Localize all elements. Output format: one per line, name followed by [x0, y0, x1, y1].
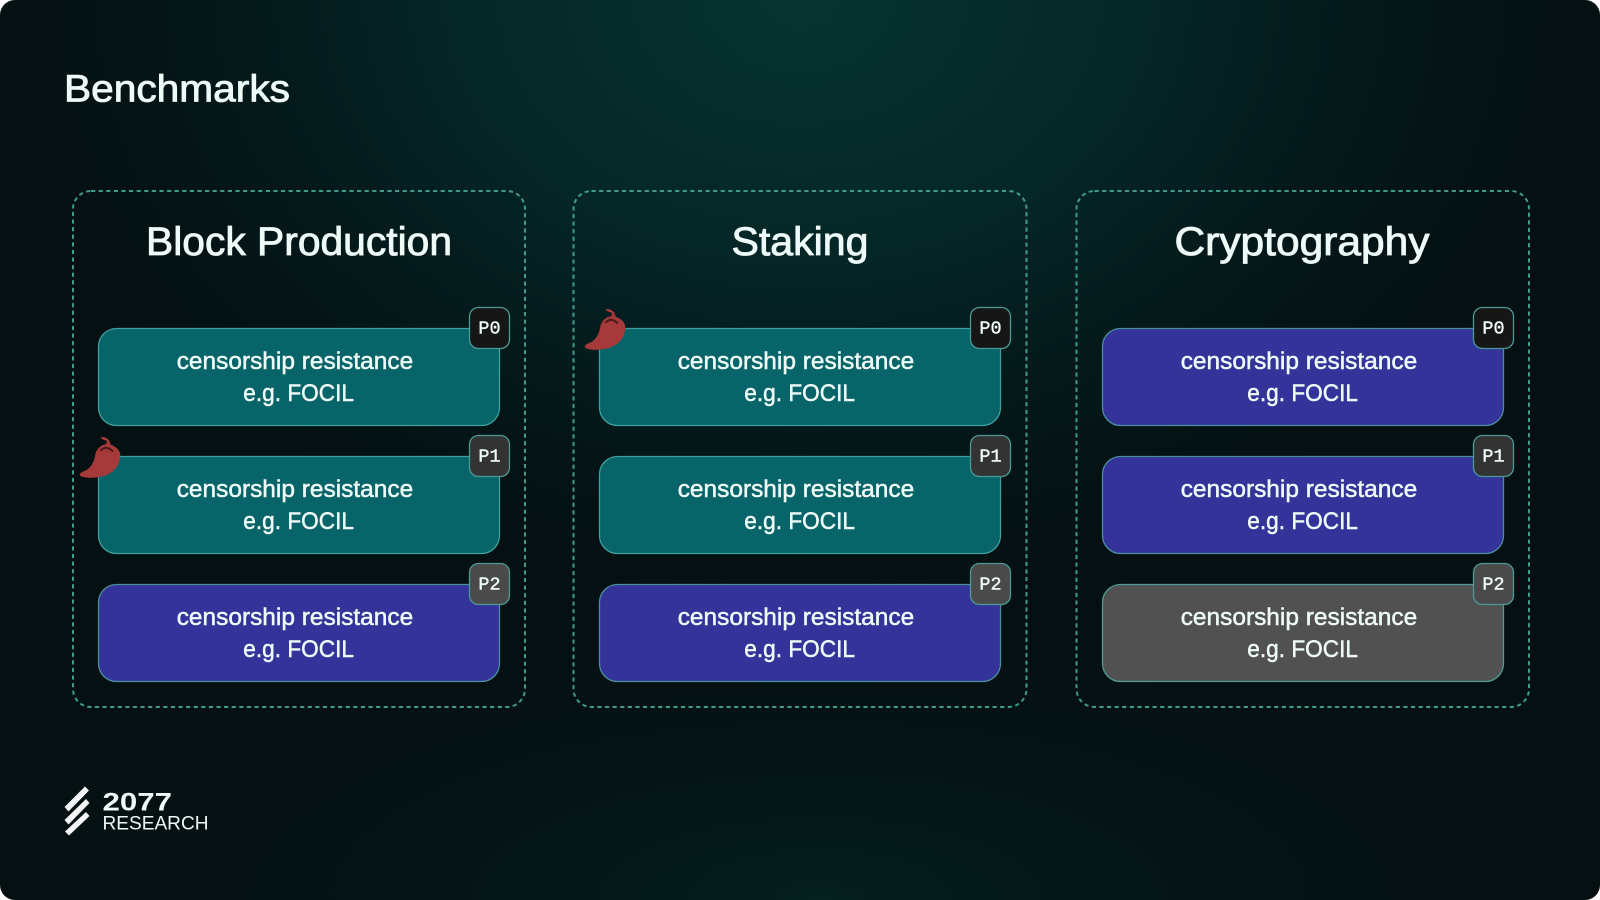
card: P0: P0: [979, 318, 1002, 340]
card: P2: censorship resistance: [678, 604, 914, 631]
card: P1: e.g. FOCIL: [243, 508, 354, 535]
card: P0: e.g. FOCIL: [243, 380, 354, 407]
card: P0: censorship resistance: [678, 348, 914, 375]
card: P0: [1102, 308, 1514, 426]
panel: Cryptography: [1076, 191, 1529, 707]
panel heading: Block Production: [146, 220, 452, 264]
logo: 2077 Research: 2077: [102, 789, 172, 817]
card: P2: e.g. FOCIL: [243, 636, 354, 663]
icon: chili pepper: [80, 437, 120, 478]
card: P1: [600, 436, 1010, 554]
card: P0: censorship resistance: [177, 348, 413, 375]
panel heading: Staking: [732, 220, 868, 264]
panel: Staking: [574, 191, 1026, 707]
card: P1: [98, 436, 510, 554]
card: P1: censorship resistance: [678, 476, 914, 503]
card: P2: [600, 564, 1010, 682]
logo: 2077 Research: RESEARCH: [102, 814, 208, 834]
card: P2: e.g. FOCIL: [744, 636, 855, 663]
card: P0: e.g. FOCIL: [1247, 380, 1358, 407]
card: P1: P1: [1482, 446, 1505, 468]
icon: logo bars: [64, 786, 90, 836]
card: P1: P1: [478, 446, 501, 468]
card: P0: e.g. FOCIL: [744, 380, 855, 407]
panel heading: Cryptography: [1174, 220, 1430, 264]
card: P0: P0: [478, 318, 501, 340]
card: P1: [1102, 436, 1514, 554]
card: P0: [98, 308, 510, 426]
card: P1: P1: [979, 446, 1002, 468]
card: P2: P2: [478, 574, 501, 596]
card: P2: P2: [1482, 574, 1505, 596]
title: Benchmarks: [64, 68, 290, 110]
card: P2: censorship resistance: [1181, 604, 1417, 631]
card: P2: e.g. FOCIL: [1247, 636, 1358, 663]
card: P2: censorship resistance: [177, 604, 413, 631]
panel: Block Production: [73, 191, 525, 707]
card: P1: e.g. FOCIL: [744, 508, 855, 535]
card: P2: [98, 564, 510, 682]
card: P0: [600, 308, 1010, 426]
card: P2: P2: [979, 574, 1002, 596]
card: P1: censorship resistance: [177, 476, 413, 503]
logo: 2077 Research: [64, 786, 208, 836]
card: P1: e.g. FOCIL: [1247, 508, 1358, 535]
card: P0: P0: [1482, 318, 1505, 340]
card: P2: [1102, 564, 1514, 682]
card: P1: censorship resistance: [1181, 476, 1417, 503]
card: P0: censorship resistance: [1181, 348, 1417, 375]
icon: chili pepper: [585, 309, 625, 350]
